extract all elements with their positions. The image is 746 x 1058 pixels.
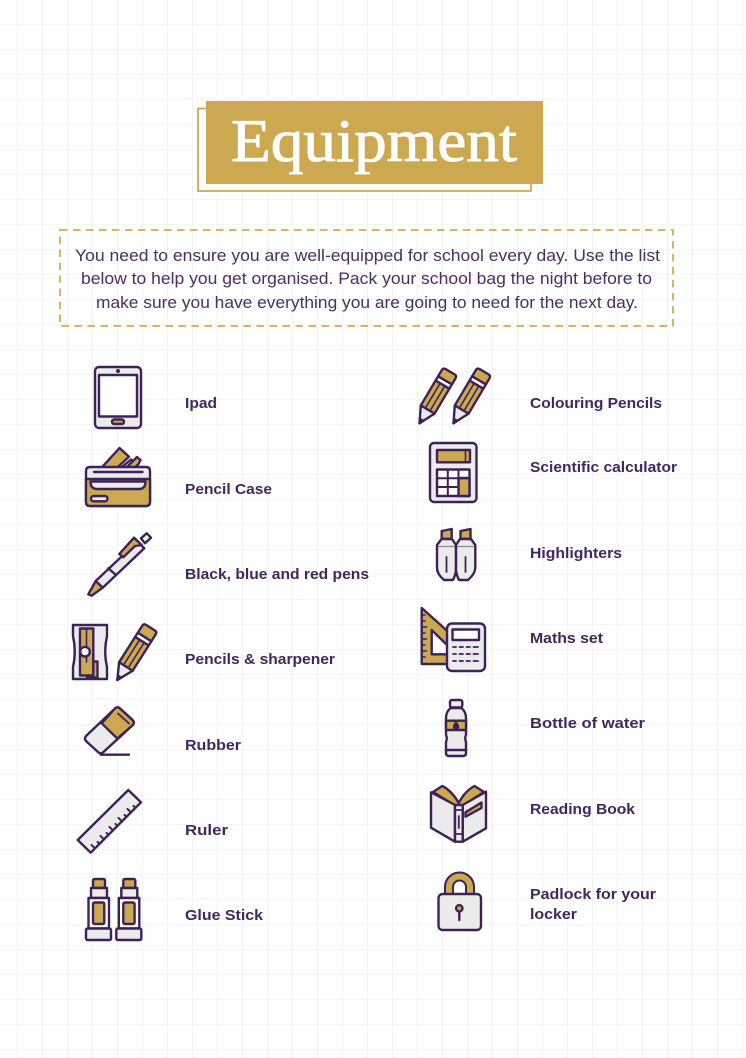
label: maths set: Maths set <box>530 630 603 647</box>
icon: bottle of water <box>446 700 466 756</box>
icon: reading book <box>431 786 486 842</box>
label: bottle of water: Bottle of water <box>530 715 645 732</box>
icon: glue sticks <box>86 879 141 940</box>
label: rubber: Rubber <box>185 737 241 754</box>
title text: Equipment <box>231 108 517 174</box>
intro text: You need to ensure you are well-equipped for school every day. Use the list <box>75 247 660 265</box>
icon: pen <box>88 533 151 596</box>
icon: colouring pencils <box>413 368 491 427</box>
label: scientific calculator: Scientific calculator <box>530 459 677 476</box>
icon: maths set <box>422 608 485 671</box>
title background <box>206 101 543 184</box>
icon: rubber <box>85 707 134 755</box>
intro text: below to help you get organised. Pack your school bag the night before to <box>81 270 652 288</box>
label: ipad: Ipad <box>185 395 217 412</box>
title offset outline <box>198 108 531 191</box>
label: highlighters: Highlighters <box>530 545 622 562</box>
label: padlock: locker <box>530 906 577 923</box>
icon: pencil case <box>86 448 150 506</box>
label: pens: Black, blue and red pens <box>185 566 369 583</box>
label: glue stick: Glue Stick <box>185 907 264 924</box>
title banner <box>198 101 543 191</box>
intro callout <box>60 230 673 326</box>
icon: ruler <box>78 790 141 853</box>
label: pencils and sharpener: Pencils & sharpener <box>185 651 335 668</box>
label: pencil case: Pencil Case <box>185 481 272 498</box>
icon: sharpener and pencil <box>73 623 157 684</box>
icon: ipad <box>95 367 141 428</box>
label: colouring pencils: Colouring Pencils <box>530 395 662 412</box>
label: ruler: Ruler <box>185 822 228 839</box>
dashed callout border <box>60 230 673 326</box>
icon: highlighters <box>437 529 475 580</box>
icon: padlock <box>438 876 481 930</box>
label: padlock: Padlock for your <box>530 886 656 903</box>
icon: calculator <box>430 443 476 502</box>
intro text: make sure you have everything you are going to need for the next day. <box>96 294 638 312</box>
label: reading book: Reading Book <box>530 801 636 818</box>
